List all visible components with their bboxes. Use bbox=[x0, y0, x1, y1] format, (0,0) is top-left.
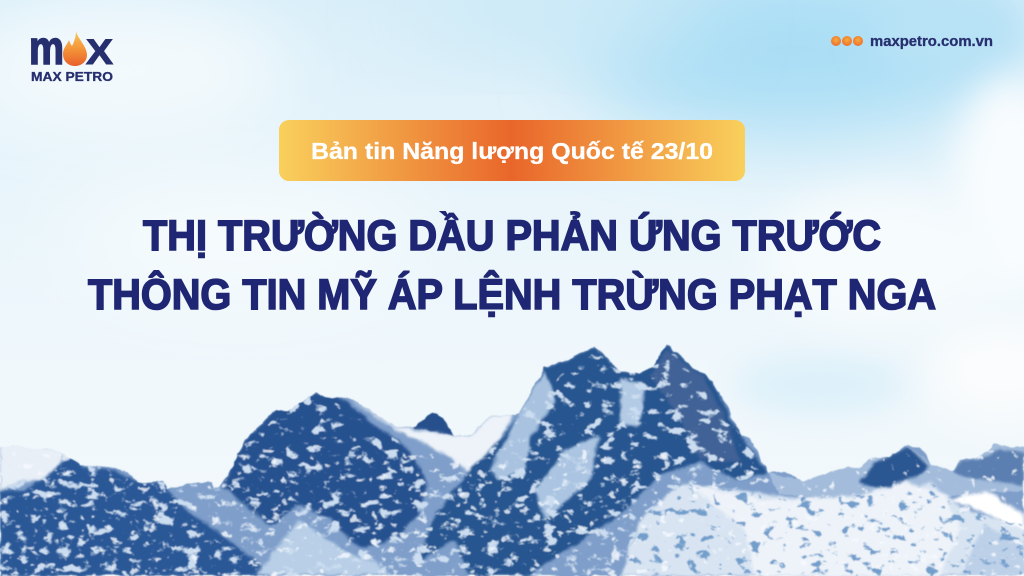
main left peak rock bbox=[222, 392, 428, 548]
rock texture: light streaks on dark faces bbox=[0, 346, 759, 576]
snowfield left bbox=[0, 440, 65, 492]
title: THỊ TRƯỜNG DẦU PHẢN ỨNG TRƯỚC bbox=[143, 211, 881, 260]
website link with dots: maxpetro.com.vn bbox=[870, 34, 993, 50]
badge: newsletter date: Bản tin Năng lượng Quốc tế 23/10 bbox=[311, 138, 713, 164]
distant right ridge bbox=[768, 443, 1024, 500]
icon: flame bbox=[63, 31, 87, 66]
logo: Max Petro: MAX PETRO bbox=[31, 70, 113, 84]
title bbox=[88, 211, 936, 319]
logo: Max Petro: m bbox=[29, 21, 64, 74]
glacier saddle bbox=[352, 400, 514, 474]
snowy foreground slopes bbox=[620, 482, 1024, 576]
twin central peaks rock bbox=[420, 345, 768, 576]
logo: Max Petro: X bbox=[86, 33, 114, 72]
left foreground ridge bbox=[0, 455, 270, 576]
badge: newsletter date bbox=[279, 120, 745, 181]
logo: Max Petro bbox=[29, 21, 114, 84]
fine snow flecks bbox=[0, 450, 1024, 576]
mountain range bbox=[0, 340, 1024, 576]
blue ice faces bbox=[490, 370, 555, 480]
small dark peak bbox=[413, 412, 455, 435]
title: THÔNG TIN MỸ ÁP LỆNH TRỪNG PHẠT NGA bbox=[88, 270, 936, 319]
dark texture on snowy slopes bbox=[626, 481, 1024, 576]
slate upper face of right peak bbox=[650, 350, 740, 462]
